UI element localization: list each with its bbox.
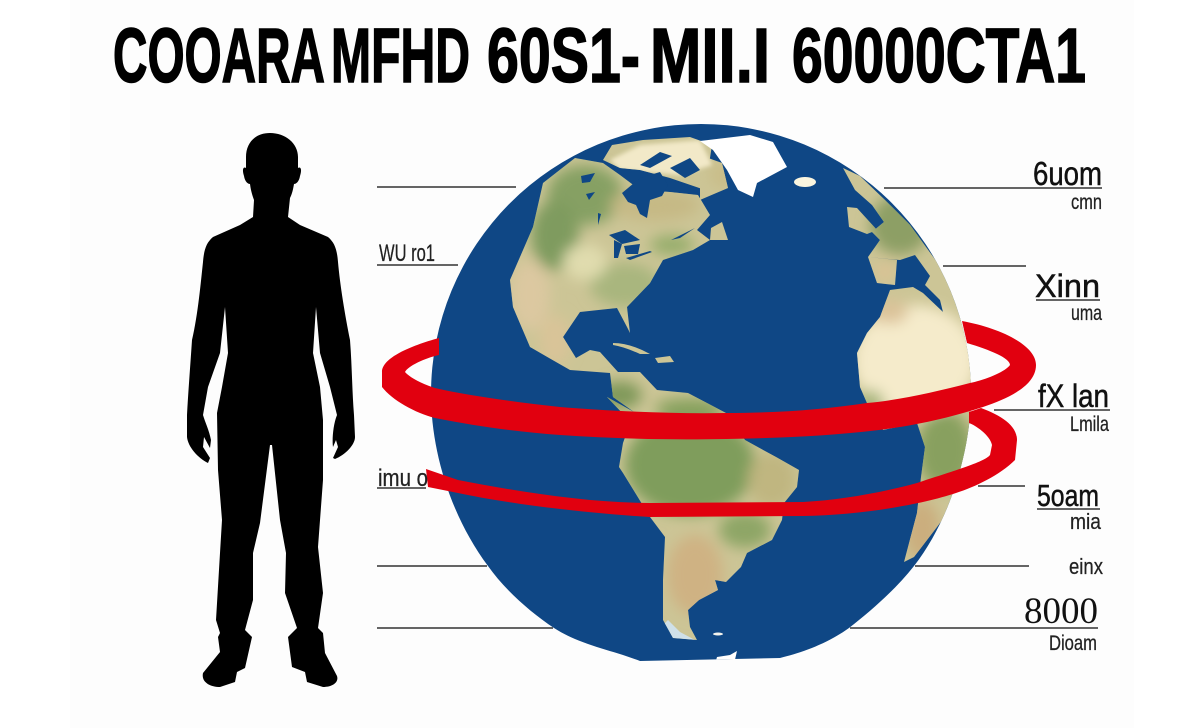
- right label 2: Xinn: [1035, 268, 1100, 304]
- right label 1: 6uom: [1033, 155, 1102, 192]
- title: COOARA: [113, 13, 325, 99]
- right label 4: mia: [1070, 509, 1102, 534]
- callout lines: left: [377, 187, 553, 628]
- right label 6: [1024, 591, 1098, 655]
- right label 3: fX lan: [1038, 378, 1109, 414]
- red ring: lower loop: [426, 408, 1017, 517]
- continents: [510, 137, 971, 640]
- red ring: upper loop: [382, 321, 1036, 439]
- antarctica: [716, 651, 737, 660]
- right label 6: 8000: [1024, 591, 1098, 632]
- title: MFHD: [331, 13, 470, 99]
- patagonia tip: [664, 620, 695, 640]
- great lakes: [581, 173, 695, 260]
- hudson bay: [622, 172, 668, 218]
- ocean: [425, 120, 977, 670]
- human silhouette: [187, 133, 355, 687]
- right label 4: 5oam: [1037, 478, 1099, 513]
- right label 5: einx: [1069, 554, 1103, 579]
- right label 3: Lmila: [1070, 413, 1109, 436]
- right label 4: [1037, 478, 1102, 534]
- title: 60000CTA1: [792, 13, 1086, 99]
- arctic islands: [610, 140, 712, 175]
- right label 1: [1033, 155, 1102, 214]
- title: MII.I: [650, 13, 770, 99]
- globe: [425, 120, 990, 670]
- left label: upper: WU ro1: [379, 240, 435, 267]
- right label 6: Dioam: [1049, 632, 1097, 655]
- iceland: [794, 177, 816, 187]
- title: 60S1-: [487, 13, 640, 99]
- right label 2: uma: [1071, 302, 1102, 325]
- right label 1: cmn: [1071, 191, 1102, 214]
- greenland: [700, 135, 787, 197]
- callout lines: right: [850, 188, 1110, 628]
- title: [113, 13, 1086, 99]
- right label 3: [1038, 378, 1109, 436]
- right label 2: [1035, 268, 1102, 325]
- left label: lower: imu o: [378, 465, 428, 492]
